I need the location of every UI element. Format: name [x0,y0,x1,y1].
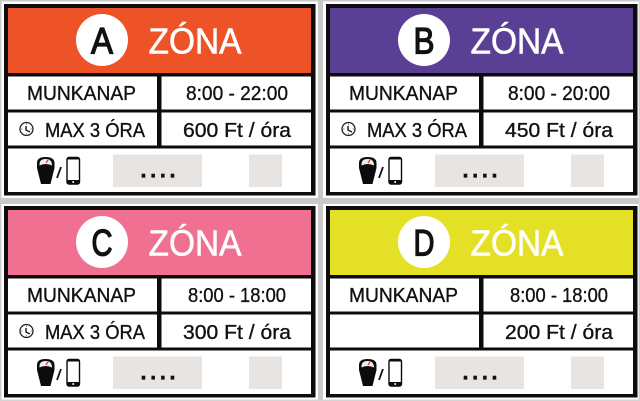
icon: parking meter [359,157,376,184]
row: price: 200 Ft / óra [505,321,614,344]
row: working days [330,278,633,312]
row: working days [8,278,311,312]
row: payment options [330,148,633,192]
row: payment options: .... [140,156,179,184]
icon: smartphone [67,360,80,386]
row: working days: 8:00 - 18:00 [510,284,608,307]
header: zone D [330,210,633,275]
row: maximum time and price: MAX 3 ÓRA [367,119,467,142]
header: zone A [8,8,311,73]
icon: smartphone [67,158,80,184]
icon: parking meter [37,359,54,386]
header: zone B [330,8,633,73]
row: payment options [8,350,311,394]
icon: clock [20,324,33,338]
header: zone C: C [92,222,112,264]
row: maximum time and price: MAX 3 ÓRA [45,119,145,142]
icon: clock [20,122,33,136]
row: working days: MUNKANAP [27,82,136,105]
header: zone B: B [414,20,434,62]
icon: smartphone [389,158,402,184]
header: zone D: ZÓNA [470,222,564,264]
row: maximum time and price: 600 Ft / óra [183,119,292,142]
row: maximum time and price: 300 Ft / óra [183,321,292,344]
row: working days: 8:00 - 18:00 [188,284,286,307]
row: working days: 8:00 - 20:00 [508,82,610,105]
icon: parking meter [359,359,376,386]
row: payment options [8,148,311,192]
header: zone D: D [414,222,434,264]
row: working days: MUNKANAP [349,82,458,105]
row: payment options [330,350,633,394]
row: maximum time and price: MAX 3 ÓRA [45,321,145,344]
panel: zone D [326,206,638,398]
row: maximum time and price [330,112,633,146]
row: payment options: .... [140,358,179,386]
icon: parking meter [37,157,54,184]
header: zone A: A [91,20,113,62]
header: zone B: ZÓNA [470,20,564,62]
row: maximum time and price: 450 Ft / óra [505,119,614,142]
row: maximum time and price [8,112,311,146]
icon: clock [342,122,355,136]
row: working days: MUNKANAP [27,284,136,307]
panel: zone B [326,4,638,196]
header: zone C [8,210,311,275]
row: payment options: .... [462,156,501,184]
header: zone A: ZÓNA [148,20,242,62]
panel: zone A [4,4,316,196]
row: working days [330,76,633,110]
panel: zone C [4,206,316,398]
header: zone C: ZÓNA [148,222,242,264]
row: price [330,314,633,348]
row: maximum time and price [8,314,311,348]
row: working days [8,76,311,110]
row: working days: MUNKANAP [349,284,458,307]
row: working days: 8:00 - 22:00 [186,82,288,105]
icon: smartphone [389,360,402,386]
row: payment options: .... [462,358,501,386]
